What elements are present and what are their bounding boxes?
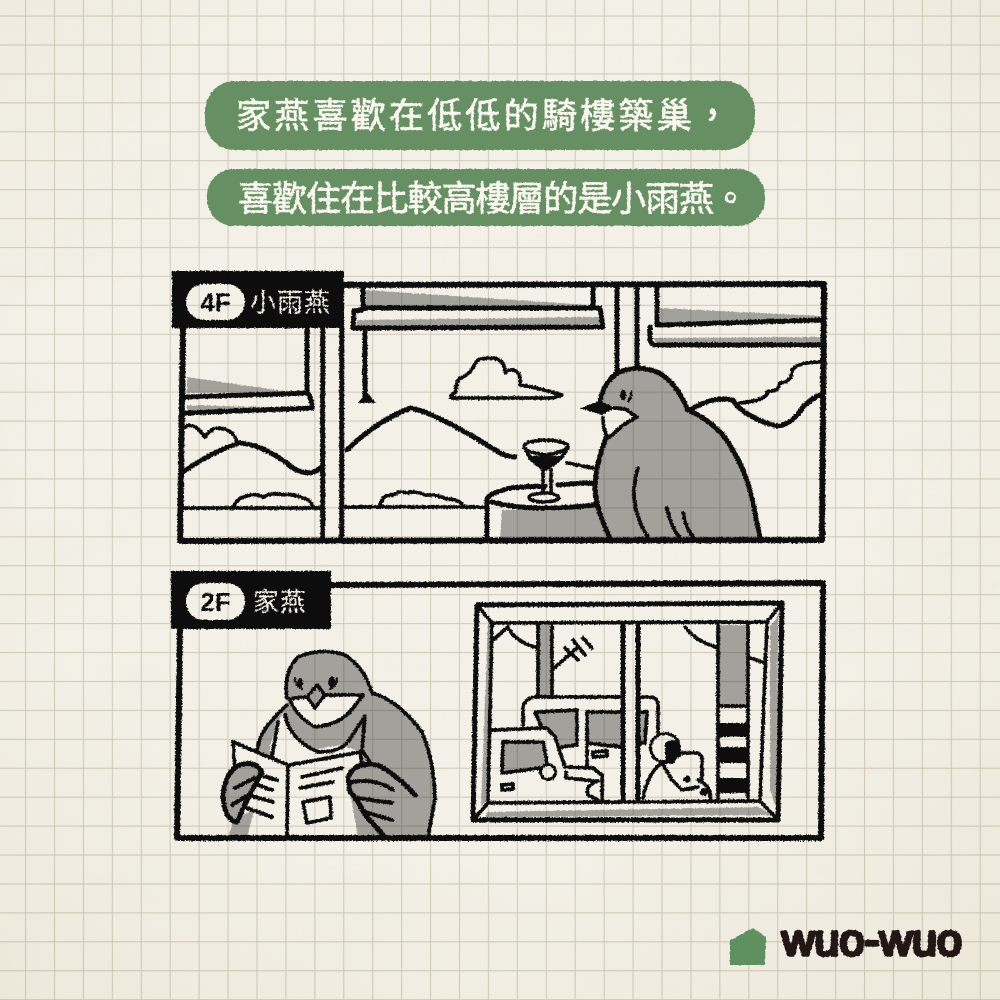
window frame shading — [481, 615, 778, 817]
frame 2F — [177, 583, 823, 838]
post — [623, 623, 638, 800]
window frame lines — [473, 603, 782, 820]
barn swallow bird — [257, 651, 435, 838]
logo: wuo-wuo — [730, 916, 962, 965]
utility wires — [493, 627, 762, 662]
hills — [183, 395, 820, 473]
little swift bird — [580, 368, 760, 538]
title: line 2: 喜歡住在比較高樓層的是小雨燕。 — [238, 180, 748, 219]
label: 4F: 4F — [200, 288, 231, 318]
title: line 1 — [205, 81, 755, 150]
scooter rider — [643, 734, 710, 800]
car — [492, 728, 602, 800]
blind cord — [358, 328, 376, 403]
wordmark: wuo-wuo — [781, 916, 962, 965]
label: 2F: 家燕 — [253, 587, 306, 617]
panel: 4F little swift — [172, 271, 824, 541]
window posts — [323, 287, 637, 540]
label: 2F: 2F — [200, 587, 231, 617]
panel: 2F barn swallow — [171, 571, 823, 838]
wine glass — [524, 440, 568, 502]
newspaper — [233, 742, 367, 838]
street window — [473, 603, 782, 820]
label: 4F: 小雨燕 — [250, 288, 330, 318]
title: line 1: 家燕喜歡在低低的騎樓築巢， — [236, 97, 730, 136]
label: 4F — [172, 271, 344, 328]
clouds — [183, 358, 820, 442]
left hand — [223, 764, 277, 837]
frame 4F — [180, 284, 824, 541]
right hand — [348, 764, 428, 838]
icon: green house — [730, 928, 766, 965]
horizon and bushes — [183, 492, 483, 508]
title: line 2 — [207, 169, 765, 226]
tall building — [718, 623, 748, 800]
table — [487, 483, 612, 538]
van — [523, 697, 658, 768]
label: 2F — [171, 571, 331, 629]
blinds and gray shading — [185, 287, 822, 413]
pole and antenna — [538, 625, 592, 697]
